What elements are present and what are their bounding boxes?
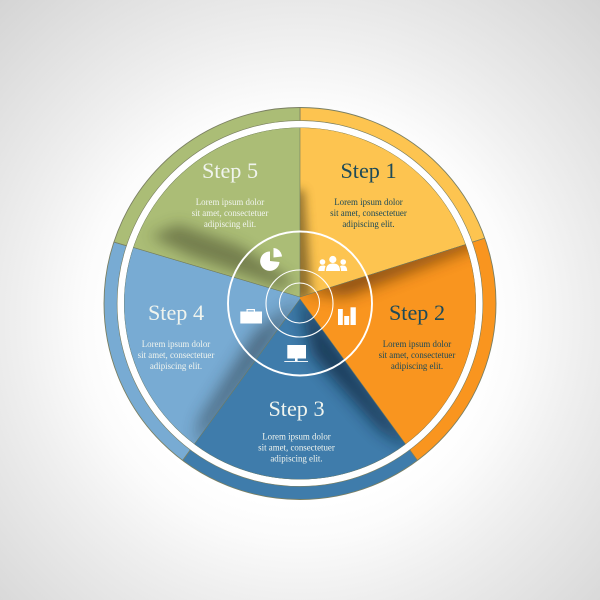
- step 1 shadow: [292, 190, 312, 300]
- text: step 5 body: adipiscing elit.: [204, 219, 256, 229]
- text: step 1 body: Lorem ipsum dolor: [334, 197, 403, 207]
- chart: outer segmented band: [80, 90, 520, 580]
- step 2 shadow: [303, 245, 470, 306]
- white ring: [121, 124, 479, 483]
- text: step 2 body: sit amet, consectetuer: [379, 350, 455, 360]
- text: step 3 body: adipiscing elit.: [270, 454, 323, 464]
- text: step 1 body: sit amet, consectetuer: [330, 208, 407, 218]
- center rings: [228, 232, 372, 376]
- panel: step 4 wedge: [124, 248, 300, 444]
- step 4 shadow: [196, 298, 304, 448]
- text: step 4 body: [138, 339, 214, 371]
- icon: people: [318, 256, 347, 271]
- text: step 1 body: [330, 197, 407, 229]
- text: step 4 body: adipiscing elit.: [150, 361, 202, 371]
- step 5 shadow: [150, 224, 294, 288]
- heading: step 4: Step 4: [148, 300, 204, 325]
- wedge outlines: [115, 120, 480, 479]
- heading: step 2: Step 2: [389, 300, 445, 325]
- text: step 4 body: sit amet, consectetuer: [138, 350, 214, 360]
- icon: bar chart: [338, 307, 356, 325]
- panel: step 2 wedge: [300, 244, 476, 444]
- panel: step 1 wedge: [300, 128, 466, 296]
- text: step 5 body: sit amet, consectetuer: [192, 208, 268, 218]
- text: step 3 body: Lorem ipsum dolor: [262, 432, 331, 442]
- text: step 3 body: sit amet, consectetuer: [258, 442, 335, 452]
- panel: step 5 wedge: [133, 128, 300, 296]
- text: step 2 body: adipiscing elit.: [391, 361, 443, 371]
- heading: step 3: Step 3: [268, 396, 325, 421]
- ring outline: [117, 121, 483, 486]
- text: step 5 body: [192, 197, 268, 229]
- heading: step 5: Step 5: [202, 158, 258, 183]
- text: step 1 body: adipiscing elit.: [342, 219, 395, 229]
- text: step 4 body: Lorem ipsum dolor: [142, 339, 210, 349]
- text: step 2 body: Lorem ipsum dolor: [383, 339, 451, 349]
- icon: monitor: [284, 345, 308, 362]
- outer band outline: [104, 108, 496, 500]
- heading: step 1: Step 1: [340, 158, 397, 183]
- icon: pie chart: [260, 248, 282, 271]
- text: step 3 body: [258, 432, 335, 464]
- text: step 2 body: [379, 339, 455, 371]
- panel: step 3 wedge: [194, 300, 406, 480]
- text: step 5 body: Lorem ipsum dolor: [196, 197, 264, 207]
- step 3 shadow: [298, 292, 415, 452]
- icon: briefcase: [240, 309, 262, 324]
